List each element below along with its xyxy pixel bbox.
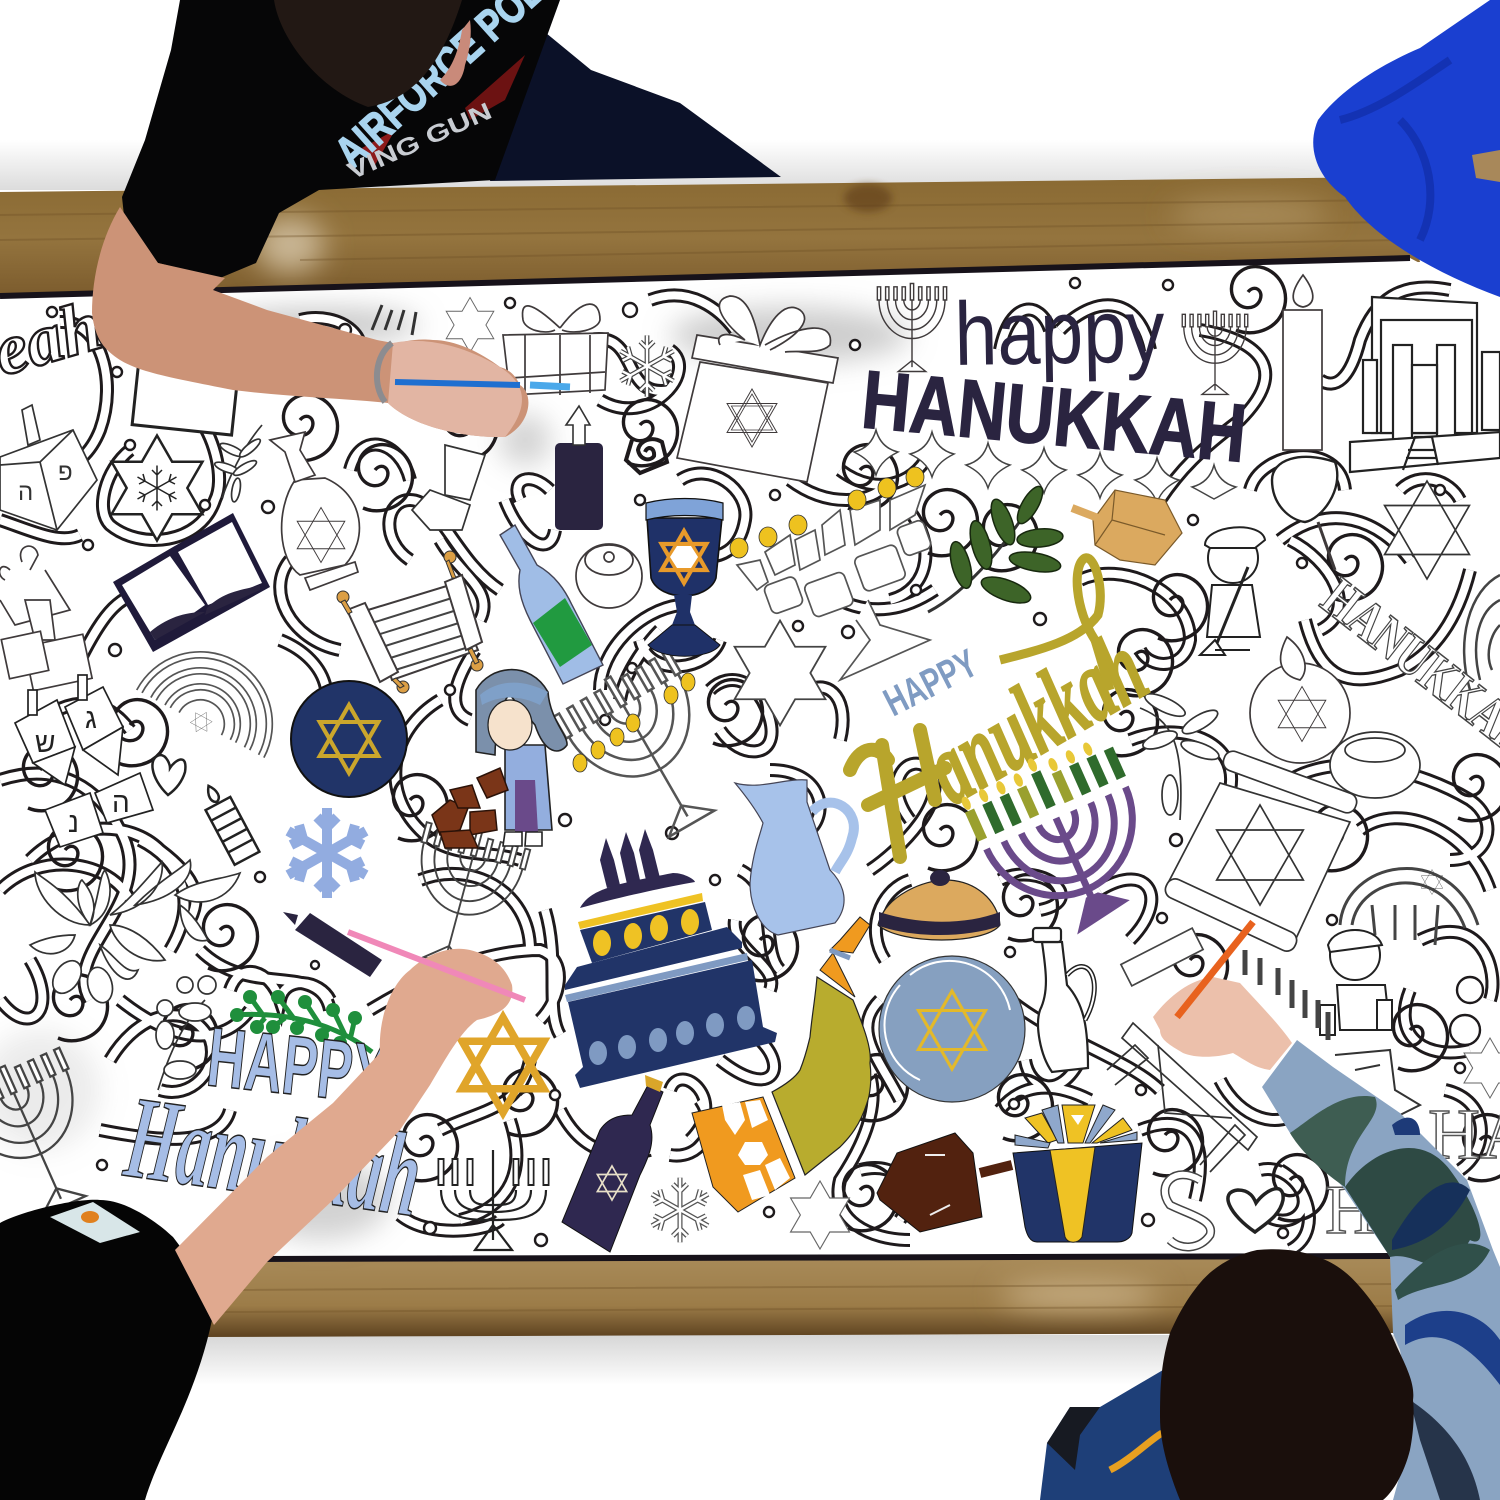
goblet xyxy=(646,498,723,656)
outline star cookie xyxy=(112,436,202,540)
outline menorah bottom center xyxy=(441,1150,546,1250)
outline star large right xyxy=(1385,481,1469,579)
outline star far right xyxy=(1464,1038,1500,1098)
outline snowflake bottom xyxy=(652,1178,708,1242)
happy hanukkah blue lettering xyxy=(118,1009,429,1242)
blue sweater person xyxy=(1313,0,1500,297)
gold star of david xyxy=(462,1018,544,1112)
title: HANUKKAH: HANUKKAH xyxy=(858,354,1250,480)
dark candle xyxy=(555,406,603,530)
shirt tag xyxy=(50,1202,140,1243)
outline oil jar xyxy=(1033,928,1094,1072)
blue pen xyxy=(395,382,570,387)
blue snowflake xyxy=(288,808,366,898)
outline dreidels: ה xyxy=(112,787,130,818)
navy plate with star xyxy=(291,681,407,797)
brown rocks xyxy=(432,768,508,848)
olive branch xyxy=(928,483,1064,612)
outline sprig right xyxy=(1140,689,1221,820)
tan dreidel xyxy=(1072,490,1182,565)
outline tall candle xyxy=(1283,275,1322,450)
bottom-right person: camo sleeve xyxy=(1262,1040,1500,1500)
outline dreidels: נ xyxy=(68,807,79,838)
outline scroll figure xyxy=(412,445,485,530)
outline striped candle xyxy=(196,779,259,865)
outline menorah lower left xyxy=(393,817,532,976)
ear xyxy=(440,20,471,86)
outline man with broom xyxy=(1200,527,1265,655)
outline candle holder top left xyxy=(372,305,416,335)
outline donut right xyxy=(1330,732,1420,798)
outline candle row xyxy=(1245,950,1328,1040)
person top: black shirt xyxy=(122,0,781,278)
outline star frame xyxy=(1107,1023,1257,1172)
HAPPY small slate: HAPPY xyxy=(877,641,985,725)
background ribbon doodles xyxy=(0,287,1492,1250)
gift with yellow ribbon xyxy=(1013,1105,1142,1242)
square spiral xyxy=(626,439,667,473)
outline menorah top 2 xyxy=(1182,311,1248,394)
outline rainbow right xyxy=(1340,869,1478,945)
outline big menorah right xyxy=(1464,575,1500,690)
outline torah scroll xyxy=(337,551,483,693)
outline temple xyxy=(1350,297,1500,472)
outline rainbow menorah xyxy=(133,626,298,766)
outline goblet under candle xyxy=(1272,457,1337,570)
Hanukkah script: Hanukkah xyxy=(118,1071,429,1242)
dark back xyxy=(490,33,781,181)
dark angled candle xyxy=(283,912,382,977)
top person arm and hand xyxy=(92,207,570,437)
bottom-left person: black shirt xyxy=(0,1200,212,1500)
outline leaf top left xyxy=(213,425,263,503)
bracelet xyxy=(377,343,392,402)
background top shadow xyxy=(0,140,1500,190)
background bottom shadow xyxy=(0,1335,1500,1385)
outline gift small xyxy=(503,304,608,395)
outline dreidels: ג xyxy=(85,703,97,734)
outline snowflake top xyxy=(620,335,674,397)
outline dreidels: ש xyxy=(35,727,55,758)
bottom-right hoodie xyxy=(1040,1370,1190,1500)
outline tablets top left xyxy=(132,367,238,435)
small outline stars row xyxy=(854,430,1236,503)
outline scroll right xyxy=(1162,749,1359,954)
spiral doodles xyxy=(23,267,1500,1231)
small dots xyxy=(47,278,1483,1246)
shofar xyxy=(692,917,871,1212)
bottom-right hair xyxy=(1160,1249,1414,1500)
outline vase xyxy=(270,432,359,590)
yellow flames center xyxy=(573,467,924,772)
k flourish xyxy=(1000,558,1110,690)
outline donut xyxy=(576,544,642,608)
outline menorah top 1 xyxy=(877,284,947,372)
outline heart right xyxy=(1228,1189,1283,1232)
HAPPY: HAPPY xyxy=(203,1009,392,1122)
outline menorah bottom left xyxy=(0,1043,119,1230)
silver plate with star xyxy=(879,956,1025,1102)
hair xyxy=(274,0,462,107)
coloring poster paper xyxy=(0,258,1500,1262)
outlined line-art objects xyxy=(0,275,1500,1250)
outline small candle right xyxy=(1121,928,1203,986)
orange pen xyxy=(1177,922,1253,1017)
outline dreidel left xyxy=(0,405,97,530)
outline S symbol xyxy=(1165,1175,1211,1247)
outline star bottom xyxy=(791,1181,849,1249)
outline gift left xyxy=(0,546,92,691)
outline heart xyxy=(152,755,185,795)
anukkah letters: anukkah xyxy=(906,610,1164,826)
gold script Hanukkah xyxy=(850,558,1164,857)
wooden table bottom edge xyxy=(200,1258,1400,1337)
green branch xyxy=(230,990,372,1052)
boy holding rocks xyxy=(476,670,567,846)
wooden table top edge xyxy=(0,177,1420,300)
outline dreidels xyxy=(15,675,153,847)
blue jug xyxy=(735,780,854,935)
pink pen xyxy=(348,932,525,1000)
outline star top left xyxy=(446,298,494,352)
purple menorah xyxy=(956,728,1172,956)
cake xyxy=(565,829,777,1088)
open book xyxy=(113,513,270,652)
outline big star xyxy=(735,620,825,726)
outline S symbol inner xyxy=(1165,1175,1211,1247)
outline lamp right xyxy=(1250,637,1350,763)
outline branch with berries xyxy=(156,976,216,1090)
outline leaf cluster xyxy=(30,860,240,1005)
outline gift large xyxy=(677,296,838,482)
outline dreidel left: ה xyxy=(18,479,33,506)
title: happy: happy xyxy=(954,281,1165,385)
paper shadows xyxy=(0,307,910,1240)
kippah hat xyxy=(878,870,1000,940)
poster edge lines xyxy=(0,258,1410,1259)
bottom-left arm and hand xyxy=(175,932,525,1325)
camo patches xyxy=(1290,1096,1500,1500)
bottom-right hand xyxy=(1153,977,1292,1070)
blue wine bottle xyxy=(500,525,603,684)
brown dreidel xyxy=(877,1133,1012,1232)
H strokes xyxy=(850,730,945,857)
outline star lower right xyxy=(1335,1050,1420,1115)
shirt graphic text: VING GUN xyxy=(343,98,496,185)
outline bearded man xyxy=(1320,930,1392,1035)
outline glasses menorah xyxy=(737,485,932,680)
outlined text bottom right H: H xyxy=(1325,1172,1376,1249)
outline menorah center xyxy=(550,645,749,857)
dark bottle with star xyxy=(562,1075,663,1252)
outline dreidel left: פ xyxy=(58,459,73,486)
